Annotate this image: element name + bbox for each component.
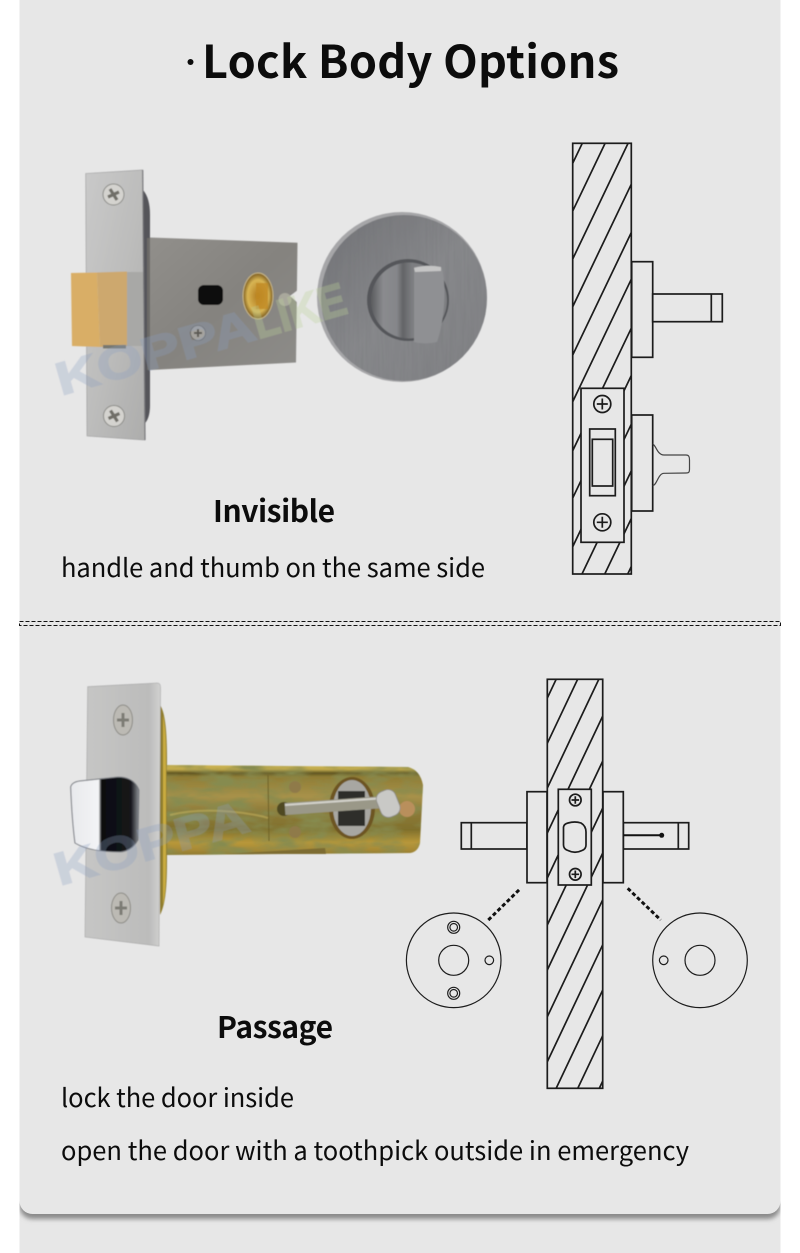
watermark	[49, 273, 352, 405]
latch bolt	[71, 272, 143, 348]
thumb turn rose	[317, 212, 487, 382]
left rose plate detail	[406, 913, 501, 1008]
lock case body	[143, 190, 298, 425]
watermark: KOPPA	[49, 299, 261, 405]
panel: invisible lock photo	[49, 170, 487, 440]
door outline	[547, 679, 603, 1088]
watermark: LIKE	[247, 273, 352, 349]
plate screws	[112, 705, 132, 923]
lower rose and thumb turn	[632, 415, 690, 511]
panel: passage line diagram	[406, 678, 748, 1090]
right rose and handle with pin	[603, 792, 689, 883]
panel: invisible line diagram	[572, 142, 724, 575]
watermark: KOPPA	[48, 790, 255, 895]
plate screws	[103, 184, 124, 426]
right rose plate detail	[653, 913, 747, 1008]
upper rose and handle	[632, 262, 722, 357]
door hatching	[548, 680, 602, 1088]
title: Lock Body Options	[202, 26, 619, 91]
lock plate	[581, 388, 624, 542]
spindle hole, rivets and rod	[277, 777, 415, 839]
panel: card bottom shadow	[20, 1202, 780, 1222]
face plate	[85, 683, 160, 946]
dotted connector left	[488, 888, 521, 920]
left rose and handle	[461, 792, 547, 883]
dotted connector right	[628, 888, 661, 920]
latch plate	[558, 789, 591, 885]
spindle slot and brass hole	[190, 273, 298, 340]
heading: passage: Passage	[217, 1003, 333, 1047]
panel: passage latch photo	[48, 683, 423, 946]
door outline	[573, 143, 631, 574]
text: invisible description: handle and thumb on the same side	[61, 548, 485, 585]
heading: invisible: Invisible	[213, 487, 335, 531]
face plate	[86, 170, 145, 440]
text: passage line two: open the door with a toothpick outside in emergency	[61, 1131, 689, 1168]
latch housing	[160, 705, 423, 915]
door hatching	[574, 144, 630, 574]
dashed divider	[20, 622, 780, 626]
text: passage line one: lock the door inside	[61, 1078, 294, 1115]
chrome latch	[71, 777, 139, 852]
